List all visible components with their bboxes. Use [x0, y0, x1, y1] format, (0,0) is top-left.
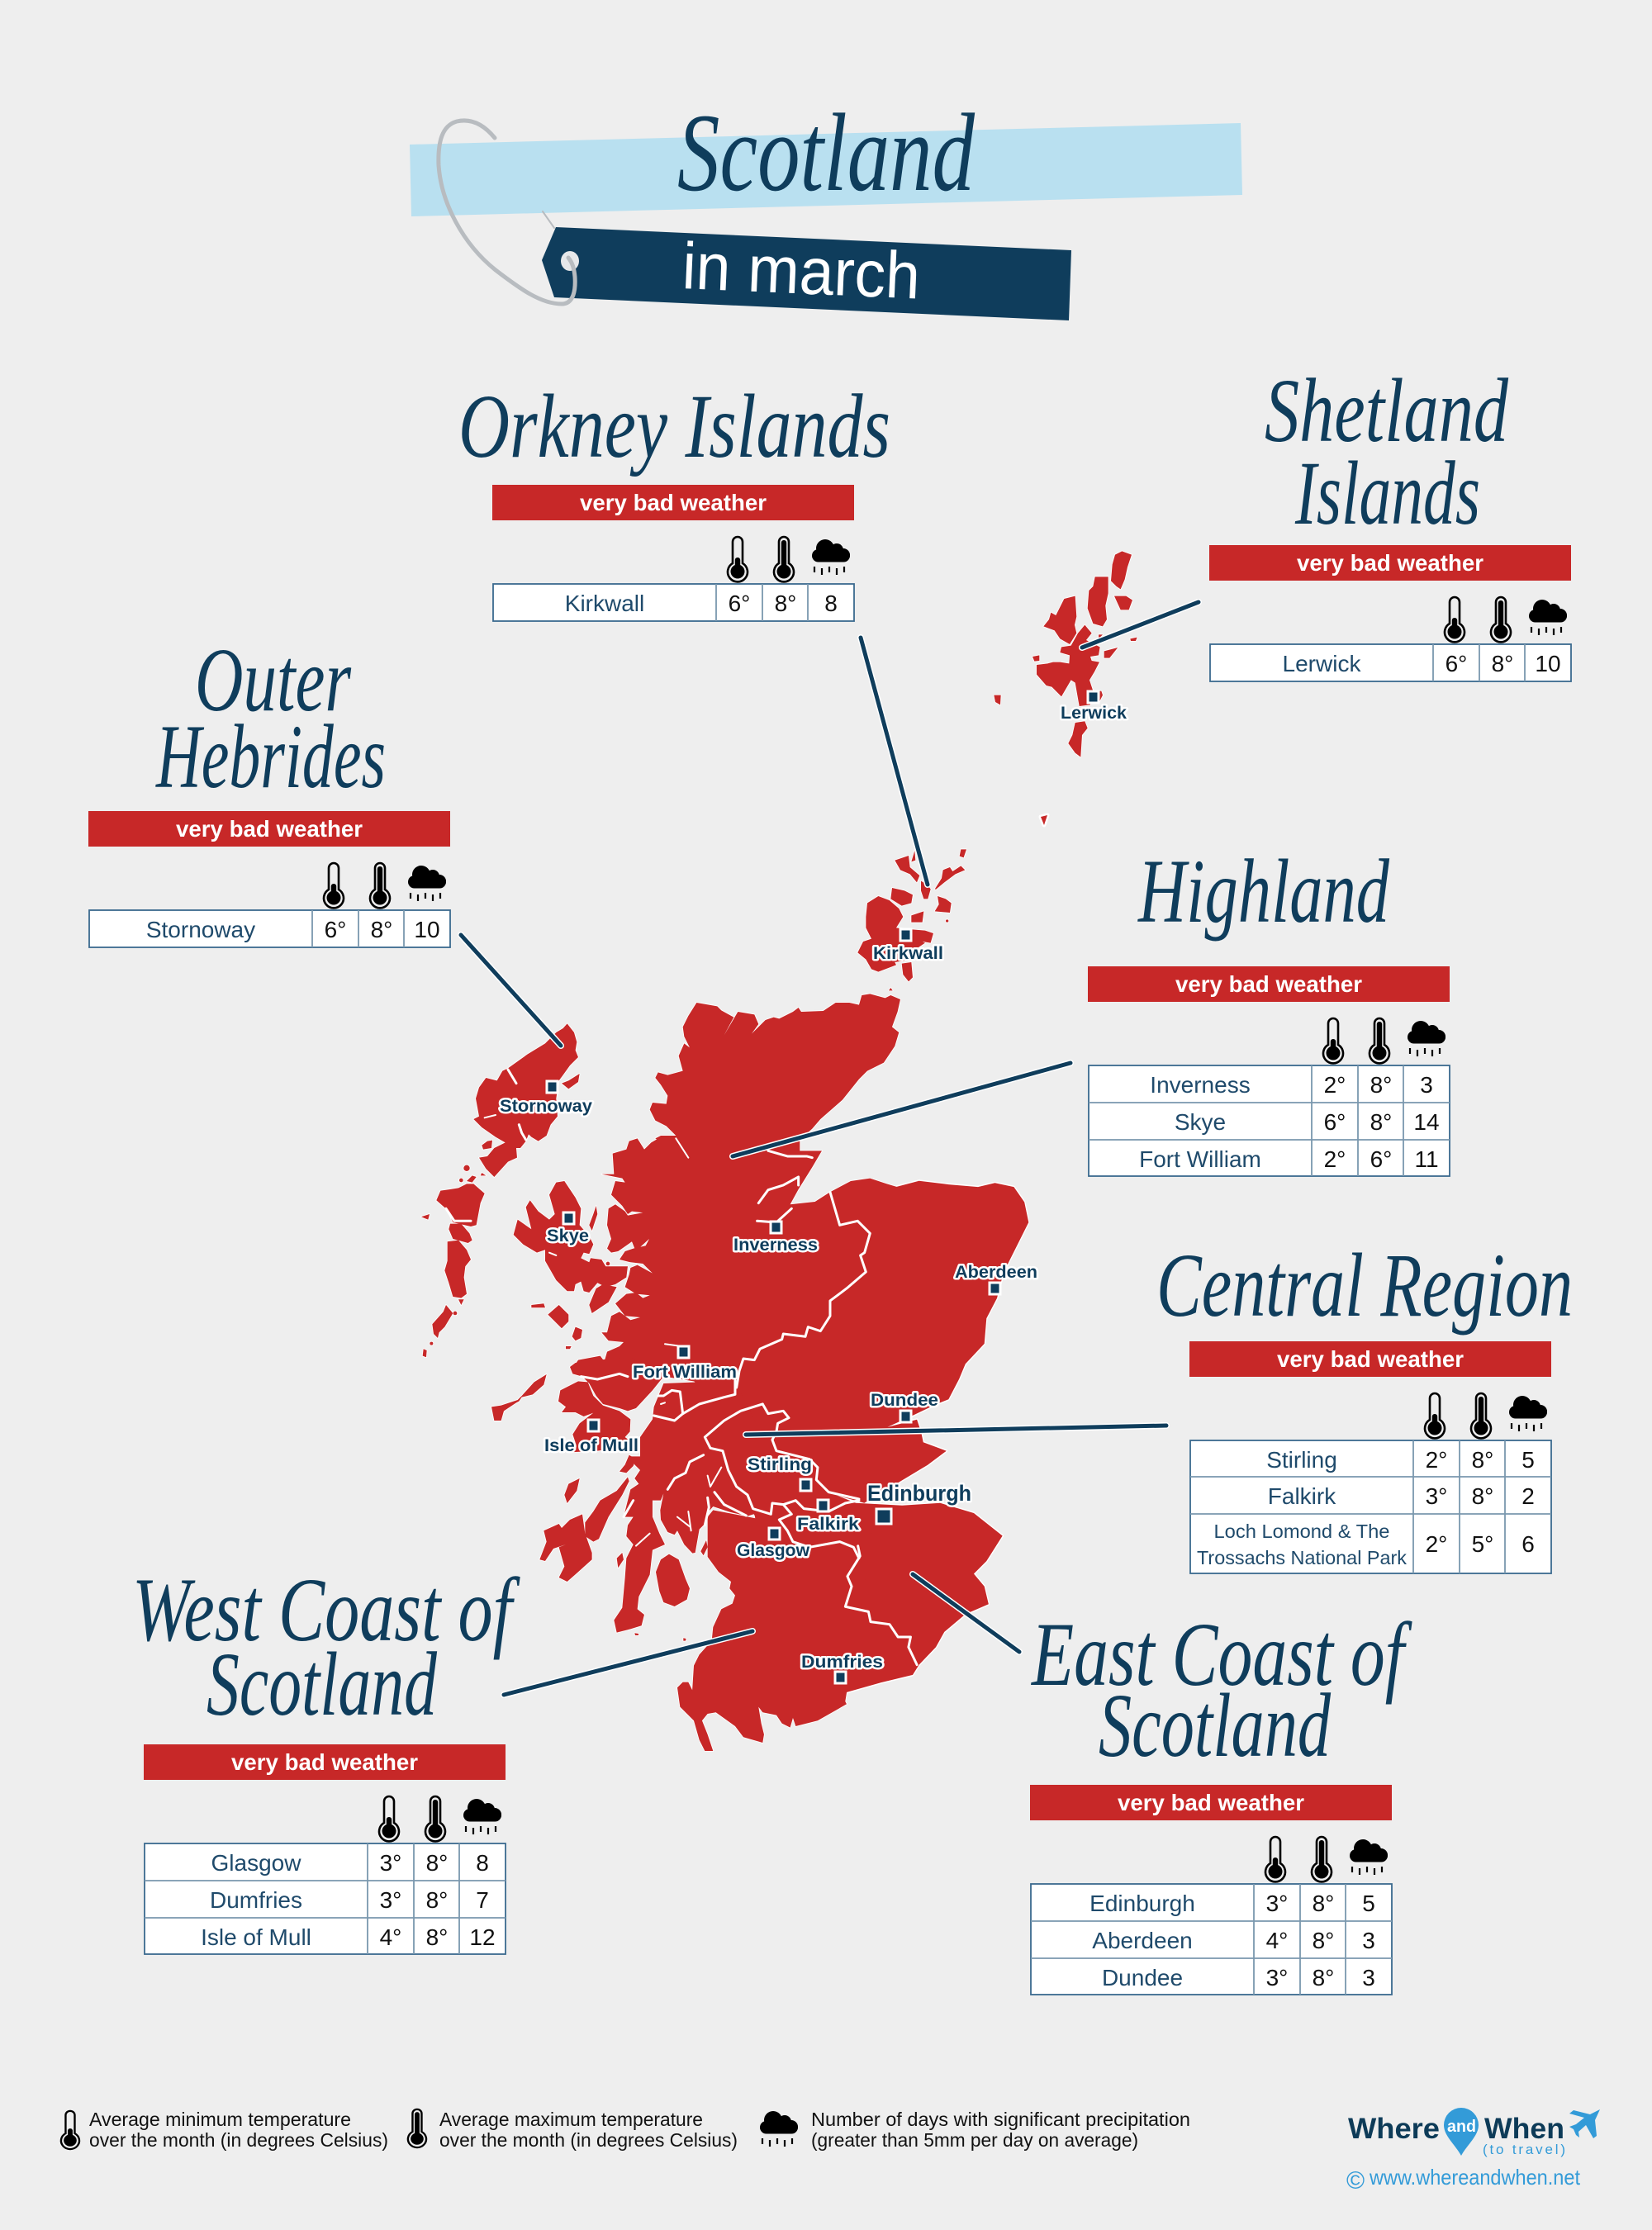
- data table: Inverness: [1150, 1072, 1251, 1098]
- data table: Aberdeen: [1092, 1928, 1193, 1953]
- data table: 4°: [1266, 1928, 1288, 1953]
- data table: Kirkwall: [565, 591, 644, 616]
- data table: 3°: [1266, 1965, 1288, 1990]
- data table: 3: [1420, 1072, 1433, 1098]
- data table: [1031, 1884, 1392, 1995]
- logo: Where and When: [1346, 2108, 1600, 2194]
- data table: Lerwick: [1283, 651, 1361, 676]
- heading: Scotland: [206, 1634, 438, 1734]
- data table: 2°: [1324, 1146, 1346, 1172]
- data table: 8°: [426, 1887, 448, 1913]
- data table: [1190, 1440, 1551, 1573]
- heading: Shetland: [1265, 360, 1509, 461]
- rating bar: [88, 811, 450, 847]
- column icons: [1425, 1393, 1547, 1438]
- panel: Orkney Islands: [458, 376, 890, 621]
- city: Skye: [547, 1212, 589, 1245]
- connector: East Coast: [913, 1574, 1019, 1652]
- city: Edinburgh: Edinburgh: [867, 1481, 971, 1506]
- map fill: [421, 551, 1137, 1751]
- rating bar: [1189, 1341, 1551, 1377]
- column icons: [728, 537, 850, 581]
- data table: 2°: [1426, 1531, 1447, 1557]
- city: Stornoway: Stornoway: [500, 1097, 592, 1116]
- legend: minimum temperature: Average minimum temperature: [89, 2109, 351, 2130]
- data table: [1089, 1065, 1450, 1176]
- region borders south-west: [581, 1374, 859, 1559]
- city: Isle of Mull: [544, 1420, 638, 1455]
- city: Falkirk: Falkirk: [797, 1515, 859, 1534]
- city: Dundee: Dundee: [871, 1391, 938, 1410]
- city: Dumfries: Dumfries: [801, 1653, 883, 1672]
- legend: minimum temperature: [61, 2109, 388, 2151]
- city: Aberdeen: Aberdeen: [955, 1263, 1037, 1282]
- city: Kirkwall: Kirkwall: [873, 944, 943, 963]
- data table: 5°: [1472, 1531, 1493, 1557]
- data table: [89, 910, 450, 947]
- website: www.whereandwhen.net: [1369, 2165, 1581, 2190]
- data table: 4°: [380, 1924, 401, 1950]
- logo plane icon: [1569, 2109, 1600, 2138]
- heading: Islands: [1294, 443, 1480, 543]
- city: Inverness: Inverness: [733, 1236, 818, 1255]
- map of Scotland: [421, 551, 1137, 1751]
- data table: 10: [414, 917, 440, 942]
- data table: Glasgow: [211, 1850, 301, 1876]
- city: Skye: Skye: [547, 1226, 589, 1245]
- data table: 8°: [1313, 1891, 1334, 1916]
- data table: [493, 584, 854, 621]
- data table: Dundee: [1102, 1965, 1183, 1990]
- data table: 11: [1414, 1146, 1439, 1172]
- title band: [410, 123, 1242, 216]
- heading: Highland: [1137, 841, 1390, 942]
- legend: maximum temperature: over the month (in degrees Celsius): [439, 2129, 738, 2151]
- rating bar: [1088, 966, 1450, 1002]
- data table: 2°: [1426, 1447, 1447, 1473]
- data table: [1210, 644, 1571, 681]
- heading: [132, 1559, 520, 1734]
- city: Glasgow: [737, 1528, 810, 1560]
- legend: precipitation: (greater than 5mm per day on average): [811, 2129, 1138, 2151]
- panel: East Coast of Scotland: [1030, 1604, 1412, 1995]
- legend: maximum temperature: Average maximum temperature: [439, 2109, 703, 2130]
- data table: 2: [1521, 1483, 1535, 1509]
- tag hole: [561, 251, 579, 271]
- panel: Central Region: [1156, 1235, 1573, 1573]
- data table: 2°: [1324, 1072, 1346, 1098]
- data table: 3°: [1266, 1891, 1288, 1916]
- data table: Stirling: [1266, 1447, 1337, 1473]
- rating bar: [144, 1744, 506, 1780]
- heading: West Coast of: [132, 1559, 520, 1660]
- heading: [1265, 360, 1509, 543]
- connector: Orkney: [861, 638, 928, 885]
- rating bar: [492, 485, 854, 520]
- data table: 8°: [1370, 1109, 1392, 1135]
- legend: precipitation: [760, 2109, 1190, 2151]
- data table: 8°: [426, 1850, 448, 1876]
- column icons: [1265, 1837, 1388, 1881]
- city: Edinburgh: [867, 1481, 971, 1524]
- heading: Hebrides: [155, 706, 386, 807]
- data table: 8°: [426, 1924, 448, 1950]
- data table: Trossachs National Park: [1197, 1547, 1408, 1568]
- data table: 8°: [775, 591, 796, 616]
- data table: 3: [1362, 1965, 1375, 1990]
- region borders and inlets Highland: [665, 1138, 870, 1388]
- data table: 6°: [325, 917, 346, 942]
- data table: 3°: [1426, 1483, 1447, 1509]
- logo wordmark right: When: [1484, 2113, 1564, 2145]
- data table: Dumfries: [210, 1887, 302, 1913]
- city: Stirling: Stirling: [748, 1455, 812, 1474]
- data table: Edinburgh: [1089, 1891, 1195, 1916]
- rating bar: [1030, 1785, 1392, 1820]
- title block: [410, 92, 1242, 320]
- heading: Orkney Islands: [458, 376, 890, 477]
- panel: Shetland Islands: [1209, 360, 1571, 681]
- data table: 8°: [1492, 651, 1513, 676]
- connector: Highland: [733, 1063, 1070, 1156]
- data table: 8: [476, 1850, 489, 1876]
- data table: 6°: [729, 591, 750, 616]
- legend: maximum temperature: [408, 2109, 738, 2151]
- city: Lerwick: [1061, 691, 1127, 723]
- heading: Scotland: [1099, 1675, 1332, 1776]
- data table: 10: [1535, 651, 1561, 676]
- data table: Falkirk: [1268, 1483, 1336, 1509]
- panel: Highland: [1088, 841, 1450, 1176]
- heading: [1030, 1604, 1412, 1776]
- data table: 8°: [1370, 1072, 1392, 1098]
- city: Inverness: [733, 1222, 818, 1255]
- map outline halo: [421, 551, 1137, 1751]
- data table: 12: [469, 1924, 496, 1950]
- data table: 8°: [1472, 1447, 1493, 1473]
- city: Stornoway: [500, 1081, 592, 1116]
- data table: Loch Lomond & The: [1214, 1521, 1390, 1542]
- column icons: [1445, 597, 1567, 642]
- city: Lerwick: Lerwick: [1061, 704, 1127, 723]
- region borders east: [845, 1546, 917, 1665]
- data table: 3°: [380, 1850, 401, 1876]
- city: Isle of Mull: Isle of Mull: [544, 1436, 638, 1455]
- legend: minimum temperature: over the month (in degrees Celsius): [89, 2129, 388, 2151]
- data table: Skye: [1175, 1109, 1226, 1135]
- city: Glasgow: Glasgow: [737, 1541, 810, 1560]
- inlets Outer Hebrides: [446, 1070, 556, 1255]
- legend: [61, 2109, 1190, 2151]
- city: Fort William: Fort William: [633, 1363, 737, 1382]
- city markers and labels: [500, 691, 1127, 1683]
- city: Aberdeen: [955, 1263, 1037, 1294]
- data table: 7: [476, 1887, 489, 1913]
- data table: 14: [1413, 1109, 1440, 1135]
- heading: Outer: [195, 629, 352, 730]
- city: Falkirk: [797, 1500, 859, 1534]
- copyright icon: ©: [1346, 2167, 1365, 2194]
- tag string: [439, 121, 575, 304]
- data table: Stornoway: [146, 917, 255, 942]
- heading: East Coast of: [1030, 1604, 1412, 1705]
- data table: 5: [1362, 1891, 1375, 1916]
- data table: 3°: [380, 1887, 401, 1913]
- data table: 3: [1362, 1928, 1375, 1953]
- column icons: [324, 863, 446, 908]
- connector: Central Region: [746, 1426, 1166, 1435]
- rating bar: [1209, 545, 1571, 581]
- city: Dumfries: [801, 1653, 883, 1683]
- panel: West Coast of Scotland: [132, 1559, 520, 1954]
- subtitle: in march: in march: [681, 229, 922, 313]
- logo wordmark left: Where: [1348, 2113, 1440, 2145]
- data table: Isle of Mull: [201, 1924, 311, 1950]
- data table: 6°: [1446, 651, 1467, 676]
- data table: 6: [1521, 1531, 1535, 1557]
- logo tagline: (to travel): [1483, 2142, 1565, 2157]
- city: Fort William: [633, 1346, 737, 1382]
- heading: [155, 629, 386, 807]
- connector: West Coast: [504, 1631, 752, 1695]
- city: Dundee: [871, 1391, 938, 1422]
- column icons: [379, 1796, 501, 1841]
- luggage tag: [542, 227, 1071, 320]
- data table: Fort William: [1139, 1146, 1261, 1172]
- data table: 8°: [1472, 1483, 1493, 1509]
- column icons: [1323, 1018, 1446, 1063]
- data table: [145, 1843, 506, 1954]
- logo pin text: and: [1447, 2118, 1476, 2136]
- data table: 6°: [1370, 1146, 1392, 1172]
- data table: 5: [1521, 1447, 1535, 1473]
- logo pin: [1444, 2108, 1479, 2156]
- data table: 6°: [1324, 1109, 1346, 1135]
- city: Stirling: [748, 1455, 812, 1491]
- title: Scotland: Scotland: [677, 92, 975, 215]
- data table: 8°: [371, 917, 392, 942]
- city: Kirkwall: [873, 929, 943, 963]
- legend: precipitation: Number of days with significant precipitation: [811, 2109, 1190, 2130]
- connector: Shetland: [1082, 602, 1199, 648]
- data table: 8°: [1313, 1965, 1334, 1990]
- connector: Outer Hebrides: [461, 935, 561, 1046]
- data table: 8: [824, 591, 838, 616]
- data table: 8°: [1313, 1928, 1334, 1953]
- panel: Outer Hebrides: [88, 629, 450, 947]
